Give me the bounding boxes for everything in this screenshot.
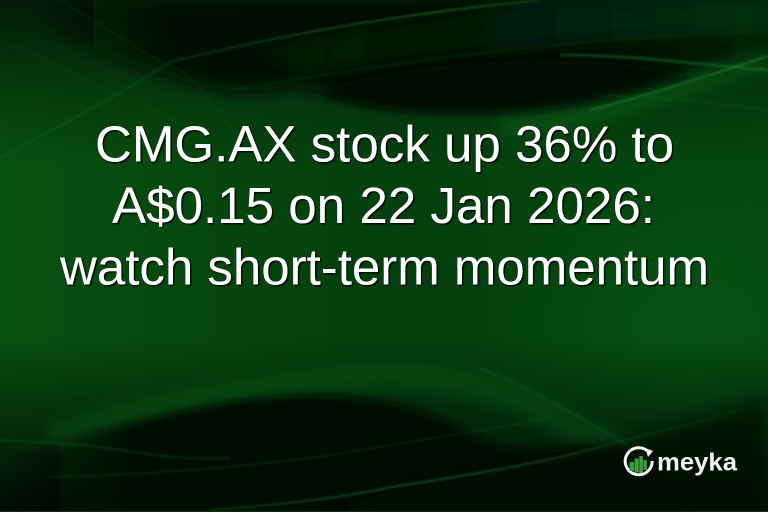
bottom edge line xyxy=(0,511,768,512)
top dark region xyxy=(0,0,768,105)
logo: meyka xyxy=(625,448,738,476)
title: A$0.15 on 22 Jan 2026: xyxy=(112,177,655,234)
wordmark: meyka xyxy=(657,448,738,476)
wedge between upper streaks xyxy=(260,0,768,75)
bright band above lower lens xyxy=(50,376,640,455)
bright band under upper lens xyxy=(500,60,768,128)
lower right dark xyxy=(300,400,768,512)
title xyxy=(59,116,709,295)
lower dark lens xyxy=(0,395,700,512)
icon: circular arrow with bars xyxy=(625,448,653,475)
title: CMG.AX stock up 36% to xyxy=(95,116,674,173)
upper dark core xyxy=(320,60,690,113)
lower light streaks xyxy=(0,368,735,510)
upper light streaks xyxy=(0,0,768,158)
title: watch short-term momentum xyxy=(59,238,709,295)
